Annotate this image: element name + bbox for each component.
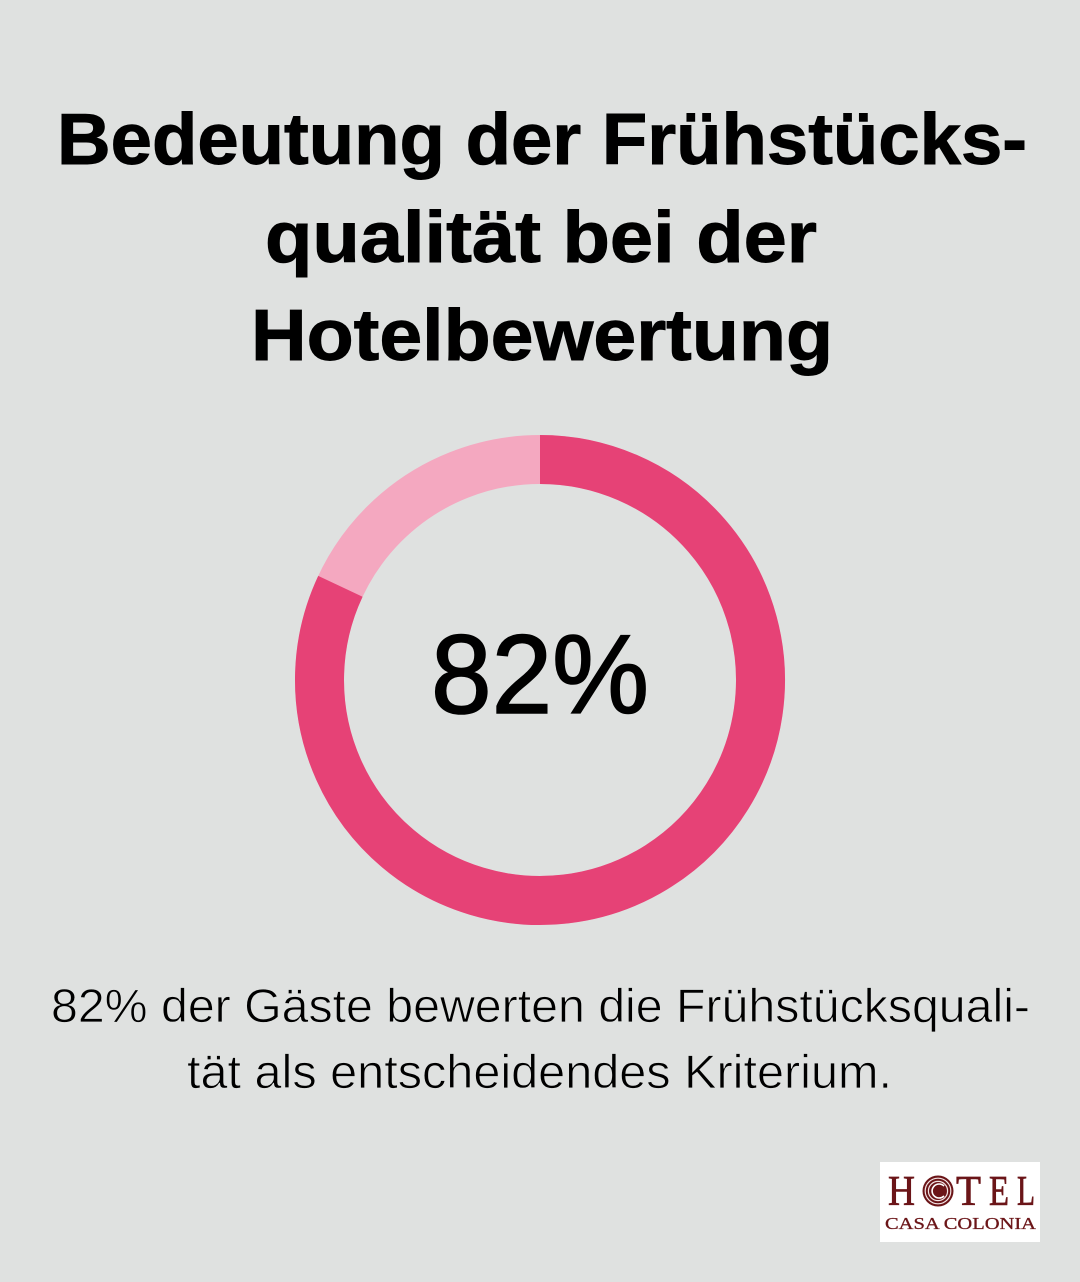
title: Hotelbewertung — [251, 296, 833, 376]
logo: Hotel Casa Colonia: L — [1017, 1169, 1035, 1215]
description text — [51, 979, 1030, 1098]
logo: Hotel Casa Colonia — [880, 1162, 1040, 1242]
donut value: 82% — [431, 612, 649, 737]
title — [57, 100, 1027, 376]
description text: tät als entscheidendes Kriterium. — [187, 1045, 892, 1098]
logo: Hotel Casa Colonia: CASA COLONIA — [885, 1214, 1037, 1233]
title: Bedeutung der Frühstücks- — [57, 100, 1027, 180]
donut chart: 82 percent — [320, 460, 761, 900]
title: qualität bei der — [265, 198, 817, 278]
description text: 82% der Gäste bewerten die Frühstücksquali- — [51, 979, 1030, 1032]
logo: Hotel Casa Colonia: H — [888, 1169, 915, 1215]
logo: Hotel Casa Colonia: E — [989, 1169, 1009, 1215]
icon: logo spiral — [922, 1176, 954, 1206]
logo: Hotel Casa Colonia: T — [956, 1169, 981, 1215]
